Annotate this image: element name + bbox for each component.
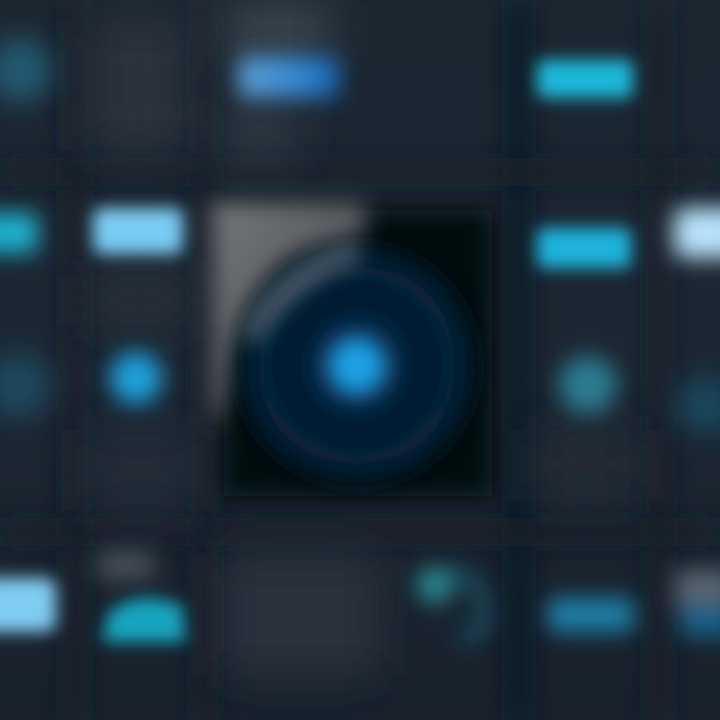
third row blobs [0,352,720,433]
disc highlight sweep [240,240,360,345]
bar: cyan bottom [102,598,186,642]
bar: light blue left edge [0,578,56,632]
bottom row blobs [0,550,720,642]
icon: teal arc [417,567,484,640]
icon: dim teal circle [0,38,52,102]
disc outer glow [235,243,479,487]
icon: dim teal left [0,354,50,418]
bar: pale blue right edge [674,208,720,258]
second row blobs [0,208,720,268]
icon: dim teal right [678,377,720,433]
bar: light blue [93,208,183,254]
bar: cyan right [537,228,631,268]
tile black base [224,210,492,496]
bar: teal blue [548,598,634,632]
panel: central tile [212,202,492,496]
background lighter panels [90,5,635,675]
bar: cyan [537,60,633,98]
top row blobs [0,38,633,102]
grey blur above cyan bar [98,550,153,580]
icon: grey and teal corner [675,570,720,637]
icon: cyan dot [110,352,162,404]
bar: blue [238,56,340,98]
bar: cyan left edge [0,213,38,253]
tile grey corner [212,202,366,430]
icon: glowing centre [329,338,385,394]
icon: teal dot [559,356,617,414]
